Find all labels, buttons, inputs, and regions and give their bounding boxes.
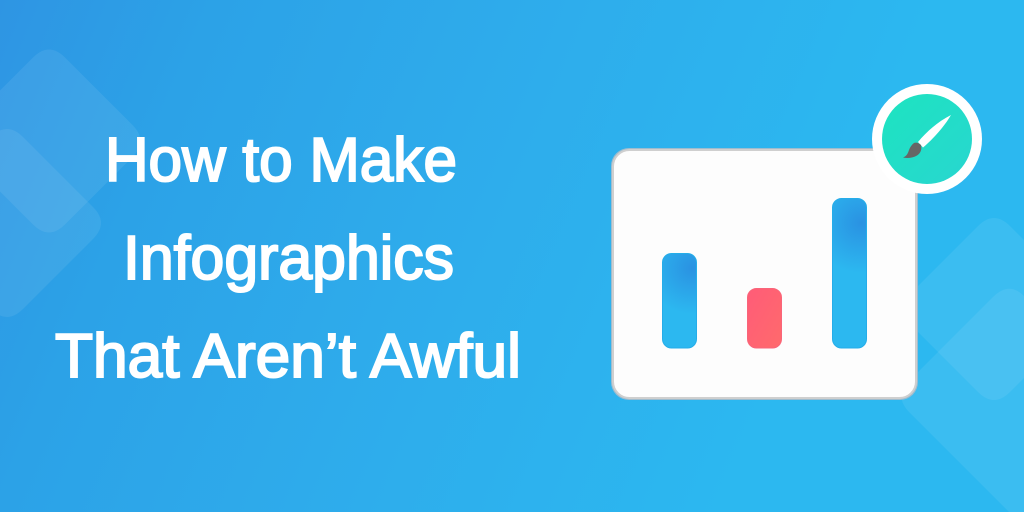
decorative diamonds left <box>0 50 140 318</box>
icon: brush handle <box>918 115 951 148</box>
title <box>55 126 521 391</box>
decorative diamonds right <box>902 218 1024 512</box>
chart card <box>611 148 918 400</box>
badge: paintbrush <box>872 84 982 194</box>
title line 2: Infographics <box>123 224 454 293</box>
bar: left blue <box>662 254 696 348</box>
title line 1: How to Make <box>105 126 457 195</box>
title line 3: That Aren’t Awful <box>55 322 521 391</box>
bar: right blue <box>832 198 866 348</box>
icon: brush head <box>903 143 921 158</box>
bar: middle red <box>748 288 782 348</box>
